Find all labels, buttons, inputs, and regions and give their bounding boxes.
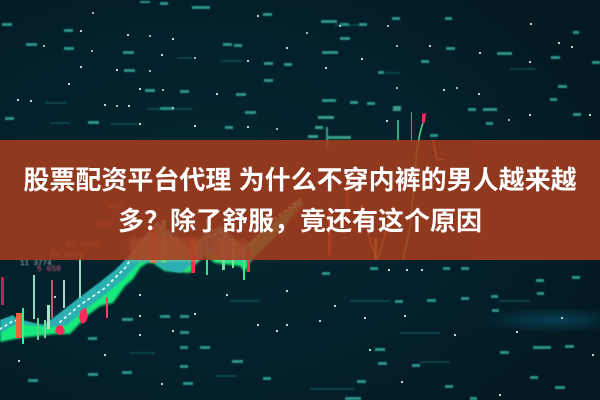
chart: white dotted trend line	[0, 200, 300, 329]
chart: red and green value labels	[20, 203, 125, 274]
chart: mid-band highlights	[130, 238, 247, 260]
chart: red and green value labels: 2631	[97, 221, 114, 229]
title: 多？除了舒服，竟还有这个原因	[118, 206, 482, 236]
chart: red and green value labels: 45 3036	[66, 241, 100, 250]
title band	[0, 140, 600, 260]
chart: upper green readouts	[308, 106, 401, 149]
chart: candlesticks	[1, 112, 444, 344]
title	[23, 165, 577, 236]
chart: glowing green under-trend	[0, 198, 303, 342]
chart: red and green value labels: 11 3774	[20, 260, 52, 268]
faint data trails	[45, 24, 535, 390]
chart: red and green value labels: 66 8425	[50, 251, 84, 260]
title: 股票配资平台代理 为什么不穿内裤的男人越来越	[23, 165, 577, 195]
chart: red and green value labels: 5 650	[37, 265, 61, 274]
chart: teal area band	[0, 222, 248, 333]
chart: red and green value labels: 1297	[108, 203, 125, 211]
